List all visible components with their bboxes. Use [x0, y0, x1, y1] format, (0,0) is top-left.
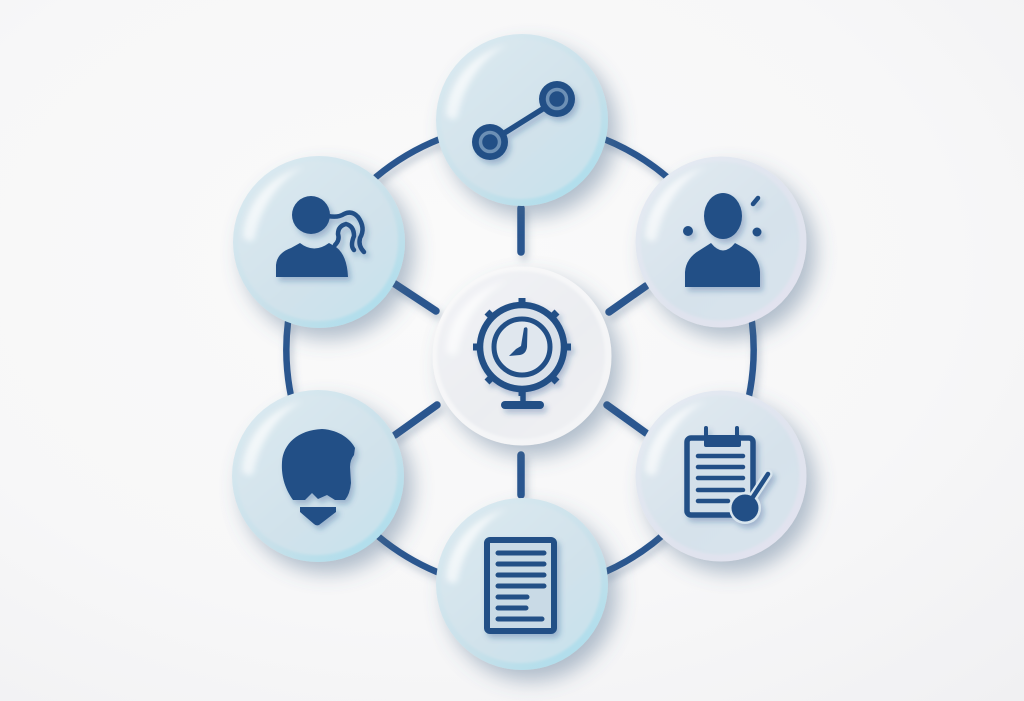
icon: document: [487, 540, 554, 631]
icon: notepad with pen: [687, 428, 768, 524]
connecting spokes: [395, 208, 646, 495]
icon: person with sparks: [683, 193, 762, 287]
icon: person with ponytail: [276, 196, 364, 277]
connecting ring segments: [286, 139, 754, 572]
node: document: [436, 498, 608, 670]
node: notepad with pen: [636, 390, 806, 562]
icon: linked nodes: [472, 81, 575, 160]
icon: head silhouette: [282, 429, 355, 525]
node: top connection: [436, 34, 608, 206]
icon: clock gear on stand: [473, 298, 571, 405]
node: person with ponytail: [233, 156, 405, 328]
node: centre clock gear: [432, 266, 612, 446]
node: person with sparks: [636, 156, 806, 328]
node: head silhouette: [232, 390, 404, 562]
